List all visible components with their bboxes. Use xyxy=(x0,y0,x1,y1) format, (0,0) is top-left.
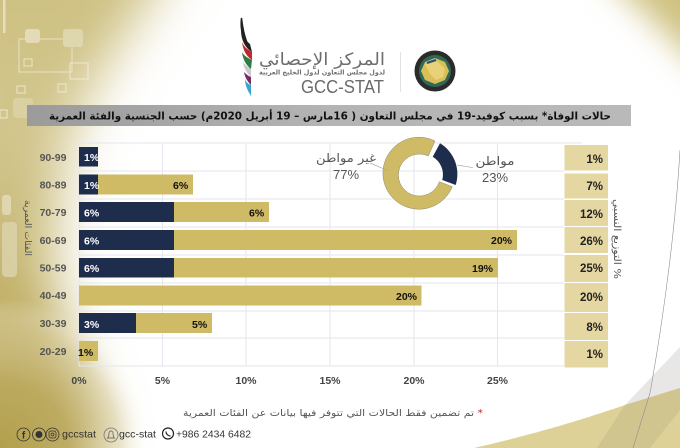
bar: 40-49 xyxy=(79,286,422,306)
handle: gccstat: gccstat xyxy=(62,428,96,440)
x axis labels xyxy=(71,375,509,387)
donut segment: citizens 23% xyxy=(433,143,457,185)
panel: relative distribution column: 8% xyxy=(586,322,603,334)
bar: 50-59: 19% xyxy=(472,263,494,275)
bar: 40-49: 20% xyxy=(396,291,418,303)
age labels: 80-89 xyxy=(40,180,67,192)
bar: 70-79 xyxy=(79,202,269,222)
donut segment: non-citizens 77% xyxy=(383,137,452,209)
column title: % التوزيع النسبي xyxy=(611,199,622,279)
bar: 30-39 xyxy=(79,313,212,333)
icon: twitter xyxy=(32,428,46,441)
bar: 60-69: 6% xyxy=(84,236,100,248)
bar chart xyxy=(22,143,582,387)
title bar xyxy=(27,105,631,126)
age labels: 30-39 xyxy=(40,318,67,330)
x axis labels: 0% xyxy=(71,375,87,387)
phone number: +986 2434 6482 xyxy=(176,428,251,440)
label: citizens: مواطن xyxy=(476,154,514,169)
bar: 30-39: 3% xyxy=(84,319,100,331)
icon: ribbon mark xyxy=(241,18,252,96)
logo name: GCC-STAT xyxy=(301,76,384,97)
bar: 90-99 xyxy=(79,147,100,166)
icon: GCC emblem xyxy=(414,50,456,92)
bar: 70-79: 6% xyxy=(84,208,100,220)
bar: 70-79: 6% xyxy=(249,208,265,220)
label: non-citizens: غير مواطن xyxy=(316,151,376,166)
logo subtitle: لدول مجلس التعاون لدول الخليج العربية xyxy=(259,68,385,76)
bar: 30-39: 5% xyxy=(192,319,208,331)
footer: social contacts xyxy=(17,428,251,442)
panel: relative distribution column: 7% xyxy=(586,181,603,193)
bar: 20-29: 1% xyxy=(78,347,94,359)
x axis labels: 10% xyxy=(235,375,257,387)
x axis labels: 25% xyxy=(487,375,509,387)
panel: relative distribution column: 25% xyxy=(580,263,603,275)
x axis labels: 20% xyxy=(403,375,425,387)
panel: relative distribution column: 20% xyxy=(580,292,603,304)
bar: 80-89: 1% xyxy=(84,180,100,192)
panel: relative distribution column xyxy=(564,145,622,368)
bar: 60-69: 20% xyxy=(491,235,513,247)
y axis title: الفئات العمرية xyxy=(22,200,32,256)
age labels: 60-69 xyxy=(40,235,67,247)
panel: relative distribution column: 1% xyxy=(586,154,603,166)
bar: 80-89 xyxy=(79,174,193,194)
footnote: * تم تضمين فقط الحالات التي تتوفر فيها بيانات عن الفئات العمرية xyxy=(183,408,483,419)
bar: 20-29 xyxy=(78,341,98,361)
icon: instagram xyxy=(46,428,59,441)
icon: snapchat xyxy=(104,428,118,442)
age labels: 20-29 xyxy=(40,346,67,358)
icon: facebook xyxy=(17,428,30,442)
logo: GCC-STAT xyxy=(241,18,456,97)
bar: 80-89: 6% xyxy=(173,180,189,192)
age labels: 50-59 xyxy=(40,262,67,274)
bar: 50-59 xyxy=(79,258,498,278)
panel: relative distribution column: 1% xyxy=(586,349,603,361)
title bar: حالات الوفاة* بسبب كوفيد-19 في مجلس التعاون ( 16مارس – 19 أبريل 2020م) حسب الجنسية والفئة العمرية xyxy=(49,108,611,122)
label: non-citizens xyxy=(316,151,376,182)
panel: relative distribution column: 12% xyxy=(580,209,603,221)
age labels: 70-79 xyxy=(40,207,67,219)
bar: 50-59: 6% xyxy=(84,263,100,275)
label: citizens: 23% xyxy=(482,170,508,185)
donut chart xyxy=(316,137,514,209)
handle: gcc-stat: gcc-stat xyxy=(119,428,156,440)
x axis labels: 15% xyxy=(319,375,341,387)
x axis labels: 5% xyxy=(155,375,171,387)
label: citizens xyxy=(476,154,514,185)
label: non-citizens: 77% xyxy=(333,167,359,182)
age labels: 90-99 xyxy=(40,152,67,164)
icon: facebook: f xyxy=(22,430,26,442)
age labels: 40-49 xyxy=(40,290,67,302)
age labels xyxy=(40,152,67,358)
bar: 60-69 xyxy=(79,230,517,250)
logo wordmark: المركز الإحصائي xyxy=(259,50,385,70)
bar: 90-99: 1% xyxy=(84,152,100,164)
panel: relative distribution column: 26% xyxy=(580,236,603,248)
icon: whatsapp xyxy=(162,428,174,439)
